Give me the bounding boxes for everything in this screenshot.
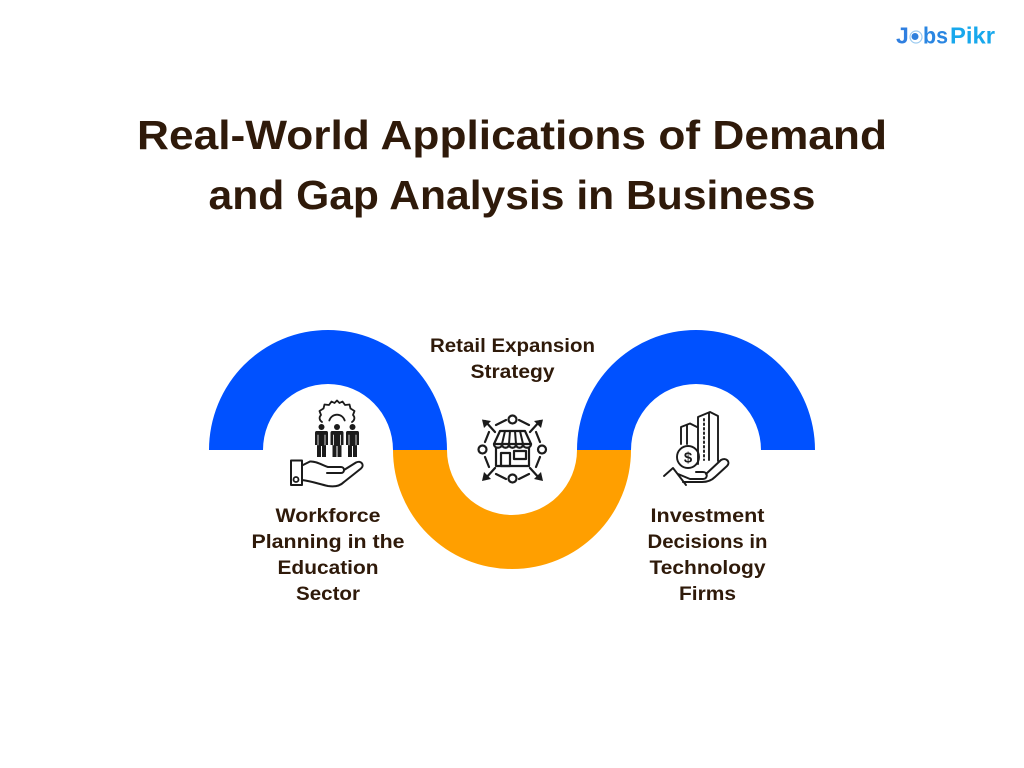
label: workforce planning: Planning in the [252,532,404,553]
arch: right blue [577,330,815,450]
icon: retail store with arrows [478,416,546,482]
icon: workforce hand with people and gear [291,400,363,486]
arch: left blue [209,330,447,450]
icon: investment hand with buildings and coin [664,412,728,485]
title: Real-World Applications of Demand [137,112,887,158]
label: workforce planning [252,506,404,605]
label: investment decisions: Firms [679,584,736,605]
label: retail expansion strategy: Retail Expansion [430,336,595,357]
label: investment decisions: Technology [650,558,766,579]
label: investment decisions: Decisions in [648,532,768,553]
label: retail expansion strategy [430,336,595,383]
logo: JobsPikr: J [896,22,909,48]
label: workforce planning: Sector [296,584,361,605]
wave diagram [209,330,815,569]
arch: middle orange [393,450,631,569]
title: and Gap Analysis in Business [208,172,816,218]
title [137,112,887,218]
logo: JobsPikr [896,22,995,48]
logo: JobsPikr: Pikr [950,22,995,48]
logo: JobsPikr: bs [923,22,948,48]
label: investment decisions: Investment [650,506,765,527]
label: retail expansion strategy: Strategy [470,362,555,383]
label: workforce planning: Education [278,558,378,579]
label: workforce planning: Workforce [276,506,380,527]
label: investment decisions [648,506,768,605]
icon: investment hand with buildings and coin: $ [684,450,693,466]
